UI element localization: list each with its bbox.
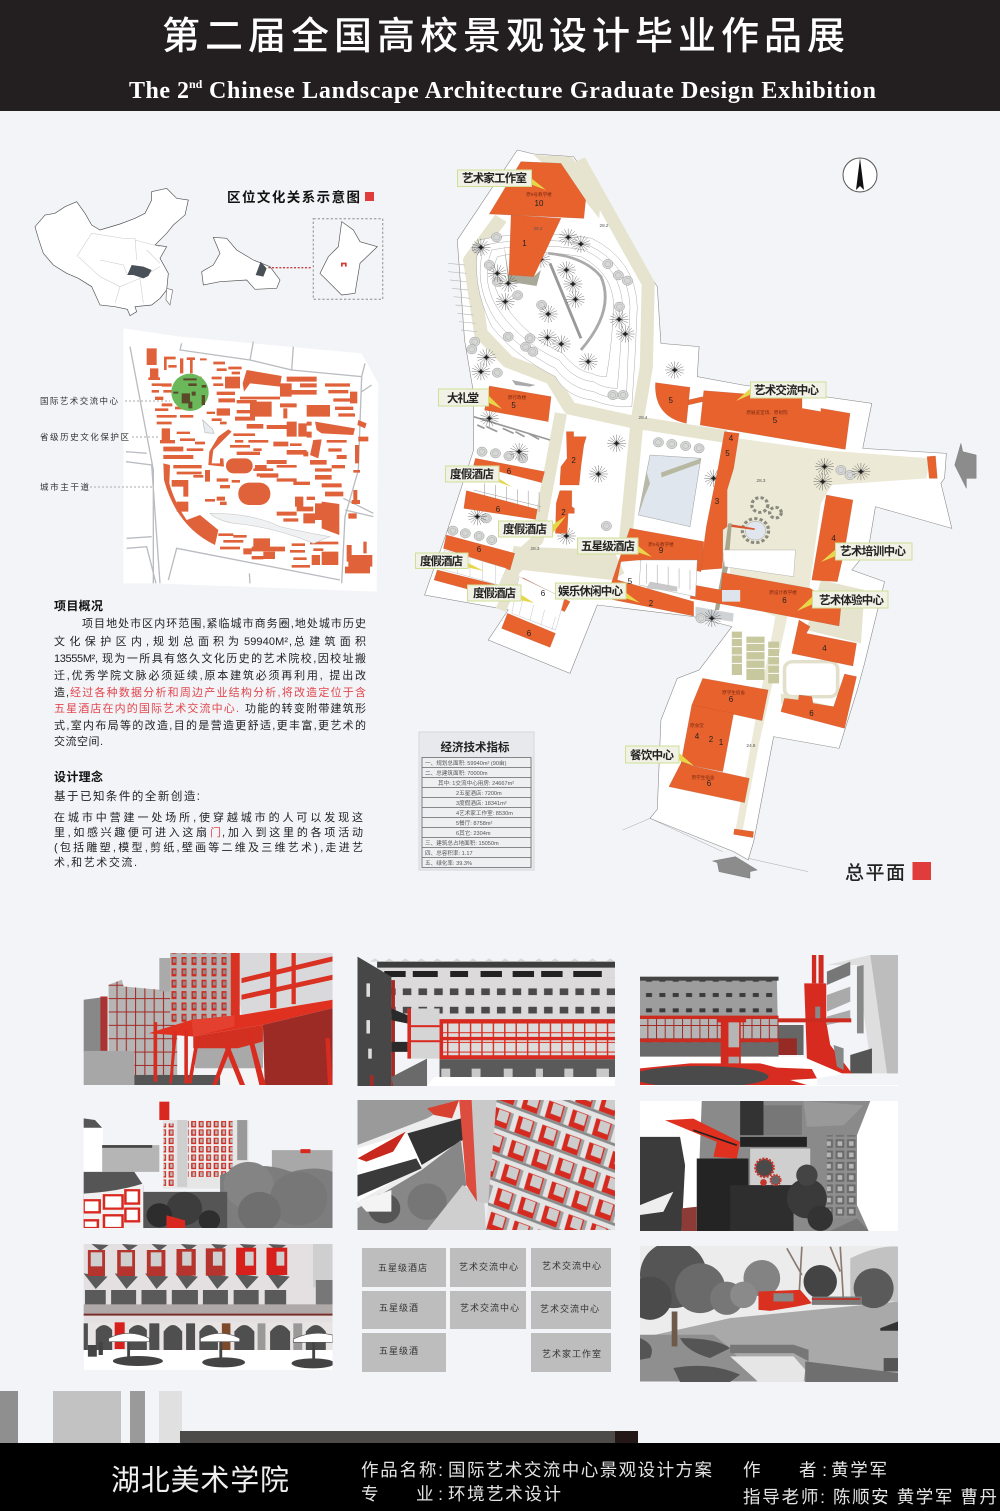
text block: project overview: 13555M², [54,653,98,665]
label: 度假酒店 west lower: 度假酒店 [420,554,463,568]
title: English: The 2 [129,78,189,104]
plan numbering: 6 [707,779,712,788]
label: 度假酒店 south: 度假酒店 [473,586,516,600]
project credits: 陈顺安 黄学军 曹丹 [833,1487,997,1507]
label: 餐饮中心: 餐饮中心 [630,748,674,762]
building footprints [434,162,937,838]
project credits [361,1460,997,1507]
table: economic indicators: 四、总容积率: 1.17 [425,849,473,857]
plan numbering: 6 [527,629,532,638]
plan numbering: 4 [695,732,700,741]
text block: project overview: 造, [54,685,69,699]
plan numbering: 1 [522,239,527,248]
table: economic indicators: 五、绿化率: 39.3% [425,859,472,867]
tile 五星级酒店 [362,1248,446,1287]
label: 艺术培训中心 [821,543,912,562]
tile 五星级酒 row 3: 五星级酒 [379,1345,419,1356]
plan numbering [477,191,836,788]
tile 五星级酒 row 2 [362,1291,446,1329]
plan numbering: 2 [571,456,576,465]
project credits: 专 [361,1484,378,1504]
label: 艺术家工作室: 艺术家工作室 [462,171,527,185]
site map labels: 城市主干道 [40,482,89,492]
render: hotel aerial [84,1102,332,1228]
title: English: nd [189,77,203,91]
plan numbering: 5 [773,416,778,425]
text block: project overview: 项目地处市区内环范围,紧临城市商务圈,地处城市历史 [82,616,366,630]
table: economic indicators: 三、建筑总占地面积: 15050m [425,839,499,847]
label: 度假酒店 center [498,516,566,537]
table: economic indicators: 5餐厅: 8758m² [456,819,493,827]
plan numbering: 9 [659,546,664,555]
plan numbering: 2 [709,735,714,744]
tile 艺术交流中心 row 2 right [531,1291,611,1329]
map: Wuhan [313,219,383,299]
text block: project overview: 功能的转变附带建筑形 [245,701,366,715]
label: 度假酒店 south [468,585,534,603]
plan numbering: 原行政楼 [508,394,527,401]
plan numbering: 4 [831,534,836,543]
render: red gate and pool [640,955,898,1086]
plan numbering: 28.3 [757,478,766,483]
tile 艺术交流中心 row 2 center [450,1291,526,1329]
icon: north compass [843,158,877,192]
project credits: 指导老师: [743,1487,825,1507]
plan numbering: 28.3 [531,546,540,551]
table: economic indicators: 3度假酒店: 18341m² [456,799,507,807]
plan numbering: 原学生宿舍 [722,689,745,696]
site ground [425,150,952,860]
text block: design concept: 在城市中营建一处场所,使穿越城市的人可以发现这 [54,810,363,824]
plan numbering: 6 [496,505,501,514]
table: economic indicators: 经济技术指标 [440,740,510,754]
text block: project overview: 规划总面积为 [153,634,239,648]
tile 艺术交流中心 row 1 right [531,1248,611,1287]
label: 大礼堂 [438,389,502,409]
plan numbering: 6 [477,545,482,554]
text block: project overview: 迁,优秀学院文脉必须延续,原本建筑必须再利用, 提出改 [54,668,366,682]
label: 艺术交流中心 [736,382,826,401]
label: 度假酒店 center: 度假酒店 [503,522,547,536]
text block: project overview: 文化保护区内 [54,634,142,648]
plan numbering: 5 [725,449,730,458]
plan numbering: 4 [729,434,734,443]
plan numbering: 2 [649,599,654,608]
master plan heading [845,862,931,884]
plan numbering: 原展览室场、原射院 [746,409,788,416]
connector [268,266,312,270]
tile 五星级酒店: 五星级酒店 [378,1262,428,1273]
project credits: 业: [416,1484,443,1504]
plan numbering: 6 [782,596,787,605]
location maps [35,188,383,316]
plan numbering: 10 [535,199,544,208]
text block: design concept: 门 [210,825,221,839]
plan numbering: 28.4 [639,415,648,420]
text block: design concept: ,加入到这里的各项活动 [222,825,363,839]
footer decorative bars [0,1391,638,1443]
arrow: south entrance [713,857,757,878]
footer band [0,1443,1000,1511]
label: 大礼堂: 大礼堂 [447,391,479,405]
label: 度假酒店 west upper: 度假酒店 [450,467,494,481]
plan numbering: 原设计教学楼 [769,589,797,596]
plan numbering: 1 [719,738,724,747]
orange building blocks [147,348,242,459]
school name: 湖北美术学院 [111,1464,289,1497]
plan numbering: 5 [511,401,516,410]
plan numbering: 6 [809,709,814,718]
tile 艺术交流中心 row 2 right: 艺术交流中心 [540,1303,600,1314]
master plan heading: 总平面 [845,862,905,884]
tile 艺术家工作室 [531,1333,611,1372]
pond [203,420,214,433]
text block: project overview: , [289,636,292,648]
label: 娱乐休闲中心: 娱乐休闲中心 [558,584,624,598]
render: building facade [358,956,615,1086]
plan numbering: 原食堂 [690,722,704,729]
text block: design concept: 术,和艺术交流. [54,855,137,869]
plan numbering: 6 [541,589,546,598]
plan numbering: 原学生宿舍 [692,774,715,781]
render: plaza with trees [640,1246,898,1382]
tile 五星级酒 row 2: 五星级酒 [379,1302,419,1313]
text block: project overview: 经过各种数据分析和周边产业结构分析,将改造定位于含 [70,685,366,699]
tile 艺术交流中心 row 1 center: 艺术交流中心 [459,1261,519,1272]
plan numbering: 6 [507,467,512,476]
label: 艺术培训中心: 艺术培训中心 [840,544,906,558]
render: canopy view [84,953,333,1085]
label: 度假酒店 west upper [446,466,512,487]
header band [0,0,1000,111]
parking stripes [448,263,477,332]
label: 五星级酒店 [578,538,652,557]
text block: project overview: , [146,636,149,648]
project credits: 者: [799,1460,827,1480]
text block: design concept [54,769,363,869]
table: economic indicators: 6其它: 2304m [456,829,491,837]
signage option tiles [362,1248,611,1372]
plan numbering: 5 [628,577,633,586]
label: 度假酒店 west lower [416,553,484,571]
site map labels [40,396,170,492]
render: balconies and cafe [84,1244,333,1370]
table: economic indicators: 一、规划总面积: 59940m² (90亩) [425,759,507,767]
plan numbering: 28.2 [600,223,609,228]
table: economic indicators: 2五星酒店: 7200m [456,789,502,797]
plan numbering: 2 [561,508,566,517]
label: 艺术家工作室 [458,170,546,190]
table: economic indicators [419,732,534,870]
project credits: 环境艺术设计 [448,1484,561,1504]
text block: project overview: 五星酒店在内的国际艺术交流中心. [54,701,239,715]
tile 艺术交流中心 row 1 right: 艺术交流中心 [542,1260,602,1271]
site master plan [416,150,976,878]
plan numbering: 28.2 [534,226,543,231]
table: economic indicators: 其中: 1交流中心用房: 24667m² [438,779,514,787]
text block: project overview: 交流空间. [54,734,103,748]
highlighted province [127,265,152,278]
table: economic indicators: 二、总建筑面积: 70000m [425,769,488,777]
map: Hubei [202,237,280,289]
text block: design concept: 基于已知条件的全新创造: [54,789,200,803]
map: China [35,188,188,316]
label: 娱乐休闲中心 [556,583,640,603]
table: economic indicators: 4艺术家工作室: 8530m [456,809,513,817]
tile 艺术家工作室: 艺术家工作室 [542,1348,602,1359]
label: 餐饮中心 [626,746,694,766]
label: 艺术体验中心: 艺术体验中心 [819,593,884,607]
gear fountain [742,498,781,543]
label: 五星级酒店: 五星级酒店 [581,539,635,553]
plan numbering: 3 [715,497,720,506]
plan numbering: 24.8 [747,743,756,748]
label: 艺术体验中心 [797,591,888,611]
beige roads [470,160,726,610]
project credits: 作 [743,1460,760,1480]
text block: project overview: 现为一所具有悠久文化历史的艺术院校,因校址搬 [102,651,366,665]
text block: design concept: (包括雕塑,模型,剪纸,壁画等二维及三维艺术),走进艺 [54,840,363,854]
hill garden walls [548,253,605,350]
plan numbering: 原5号教学楼 [648,541,674,548]
text block: design concept: 里,如感兴趣便可进入这扇 [54,825,207,839]
text block: project overview: 式,室内布局等的改造,目的是营造更舒适,更丰富,更艺术的 [54,718,366,732]
text block: project overview: 总建筑面积 [294,634,366,648]
site figure-ground map [123,328,378,592]
tree symbols [448,229,870,545]
hill garden contours [476,234,637,407]
plan numbering: 原9号教学楼 [526,191,552,198]
render: tower looking down [358,1100,615,1230]
render: top view with gears [640,1101,898,1231]
text block: project overview [54,599,366,748]
site map labels: 国际艺术交流中心 [40,396,118,406]
label: 艺术交流中心: 艺术交流中心 [754,383,820,397]
plan numbering: 4 [822,644,827,653]
location diagram heading: 区位文化关系示意图 [227,189,360,205]
plan numbering: 5 [668,396,673,405]
title: English: Chinese Landscape Architecture Graduate Design Exhibition [209,78,876,104]
tile 艺术交流中心 row 1 center [450,1248,526,1287]
arrow: east entrance [955,443,976,488]
tile 艺术交流中心 row 2 center: 艺术交流中心 [460,1302,520,1313]
marker: project site [171,374,209,411]
heading: design concept: 设计理念 [54,769,103,784]
pond plaza [638,455,701,527]
tile 五星级酒 row 3 [362,1333,446,1372]
heading: project overview: 项目概况 [54,599,103,613]
project credits: 国际艺术交流中心景观设计方案 [448,1460,712,1480]
site map labels: 省级历史文化保护区 [40,432,129,442]
project credits: 作品名称: [361,1460,443,1480]
project credits: 黄学军 [831,1460,887,1480]
text block: project overview: 59940M² [244,636,288,648]
title: Chinese: 第二届全国高校景观设计毕业作品展 [162,16,845,58]
plan numbering: 6 [729,695,734,704]
